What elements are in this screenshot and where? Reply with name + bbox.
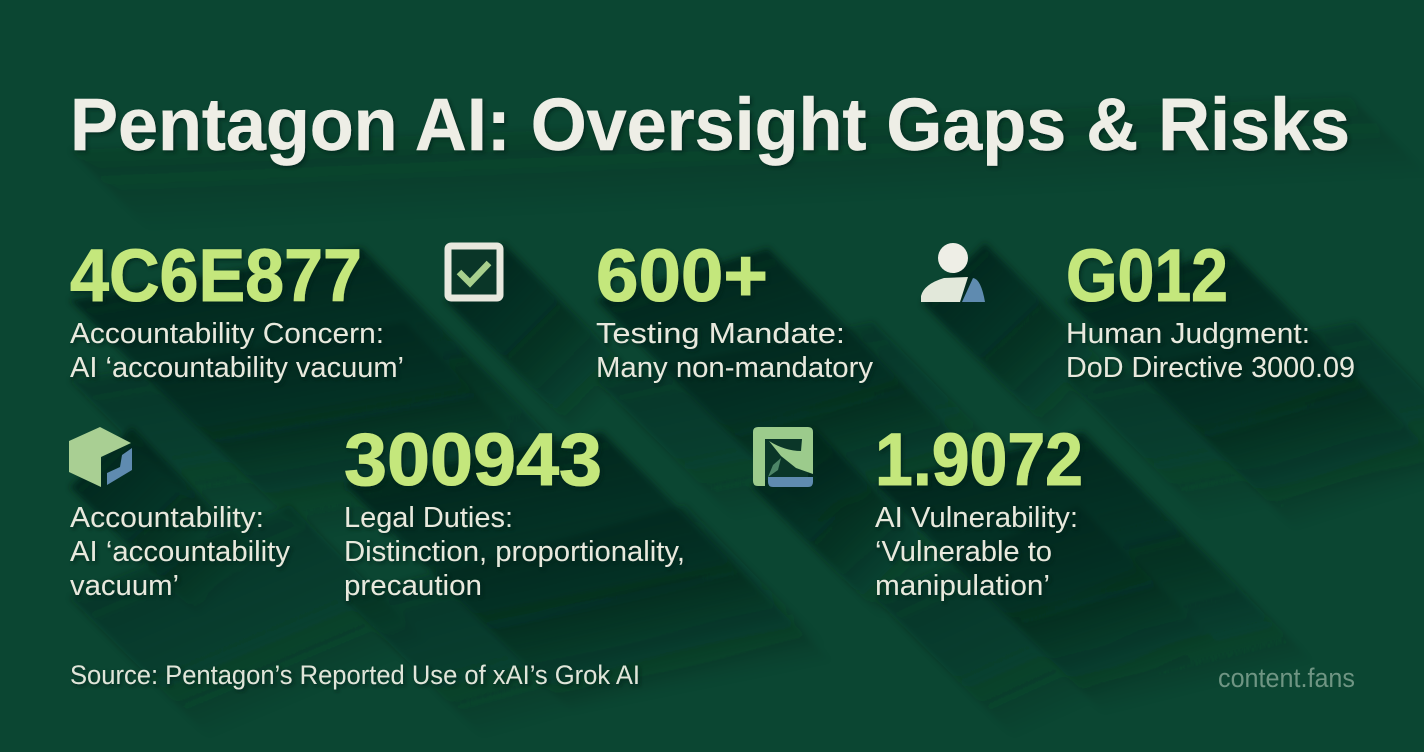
- number: G012: [1066, 234, 1228, 317]
- description: DoD Directive 3000.09: [1066, 352, 1355, 384]
- description: ‘Vulnerable to: [875, 536, 1052, 568]
- icon: person: [921, 243, 985, 302]
- label: Accountability:: [70, 502, 264, 534]
- number: 300943: [344, 418, 602, 501]
- icon: framed chart: [753, 427, 813, 487]
- description: AI ‘accountability vacuum’: [70, 352, 404, 384]
- stat: 600+ testing mandate: [596, 234, 874, 384]
- title: Pentagon AI: Oversight Gaps & Risks: [70, 83, 1350, 166]
- description: Many non-mandatory: [596, 352, 874, 384]
- stat: accountability: [70, 502, 290, 602]
- stat: 4C6E877 accountability concern: [70, 234, 404, 384]
- stat: G012 human judgment: [1066, 234, 1355, 384]
- number: 1.9072: [875, 418, 1083, 501]
- icon: checkbox: [448, 246, 500, 298]
- stat: 300943 legal duties: precaution: [344, 570, 482, 602]
- number: 600+: [596, 234, 768, 317]
- label: Accountability Concern:: [70, 318, 384, 350]
- stat: 300943 legal duties: [344, 418, 685, 602]
- stat: 1.9072 AI vulnerability: manipulation’: [875, 570, 1050, 602]
- brand mark: content.fans: [1218, 663, 1355, 693]
- stat: 1.9072 AI vulnerability: [875, 418, 1083, 602]
- label: Human Judgment:: [1066, 318, 1310, 350]
- description: AI ‘accountability: [70, 536, 290, 568]
- label: Legal Duties:: [344, 502, 513, 534]
- number: 4C6E877: [70, 234, 362, 317]
- stat: accountability: vacuum’: [70, 570, 179, 602]
- label: AI Vulnerability:: [875, 502, 1078, 534]
- label: Testing Mandate:: [596, 318, 845, 350]
- source note: Source: Pentagon’s Reported Use of xAI’s Grok AI: [70, 660, 640, 690]
- description: Distinction, proportionality,: [344, 536, 685, 568]
- icon: cube: [69, 427, 132, 487]
